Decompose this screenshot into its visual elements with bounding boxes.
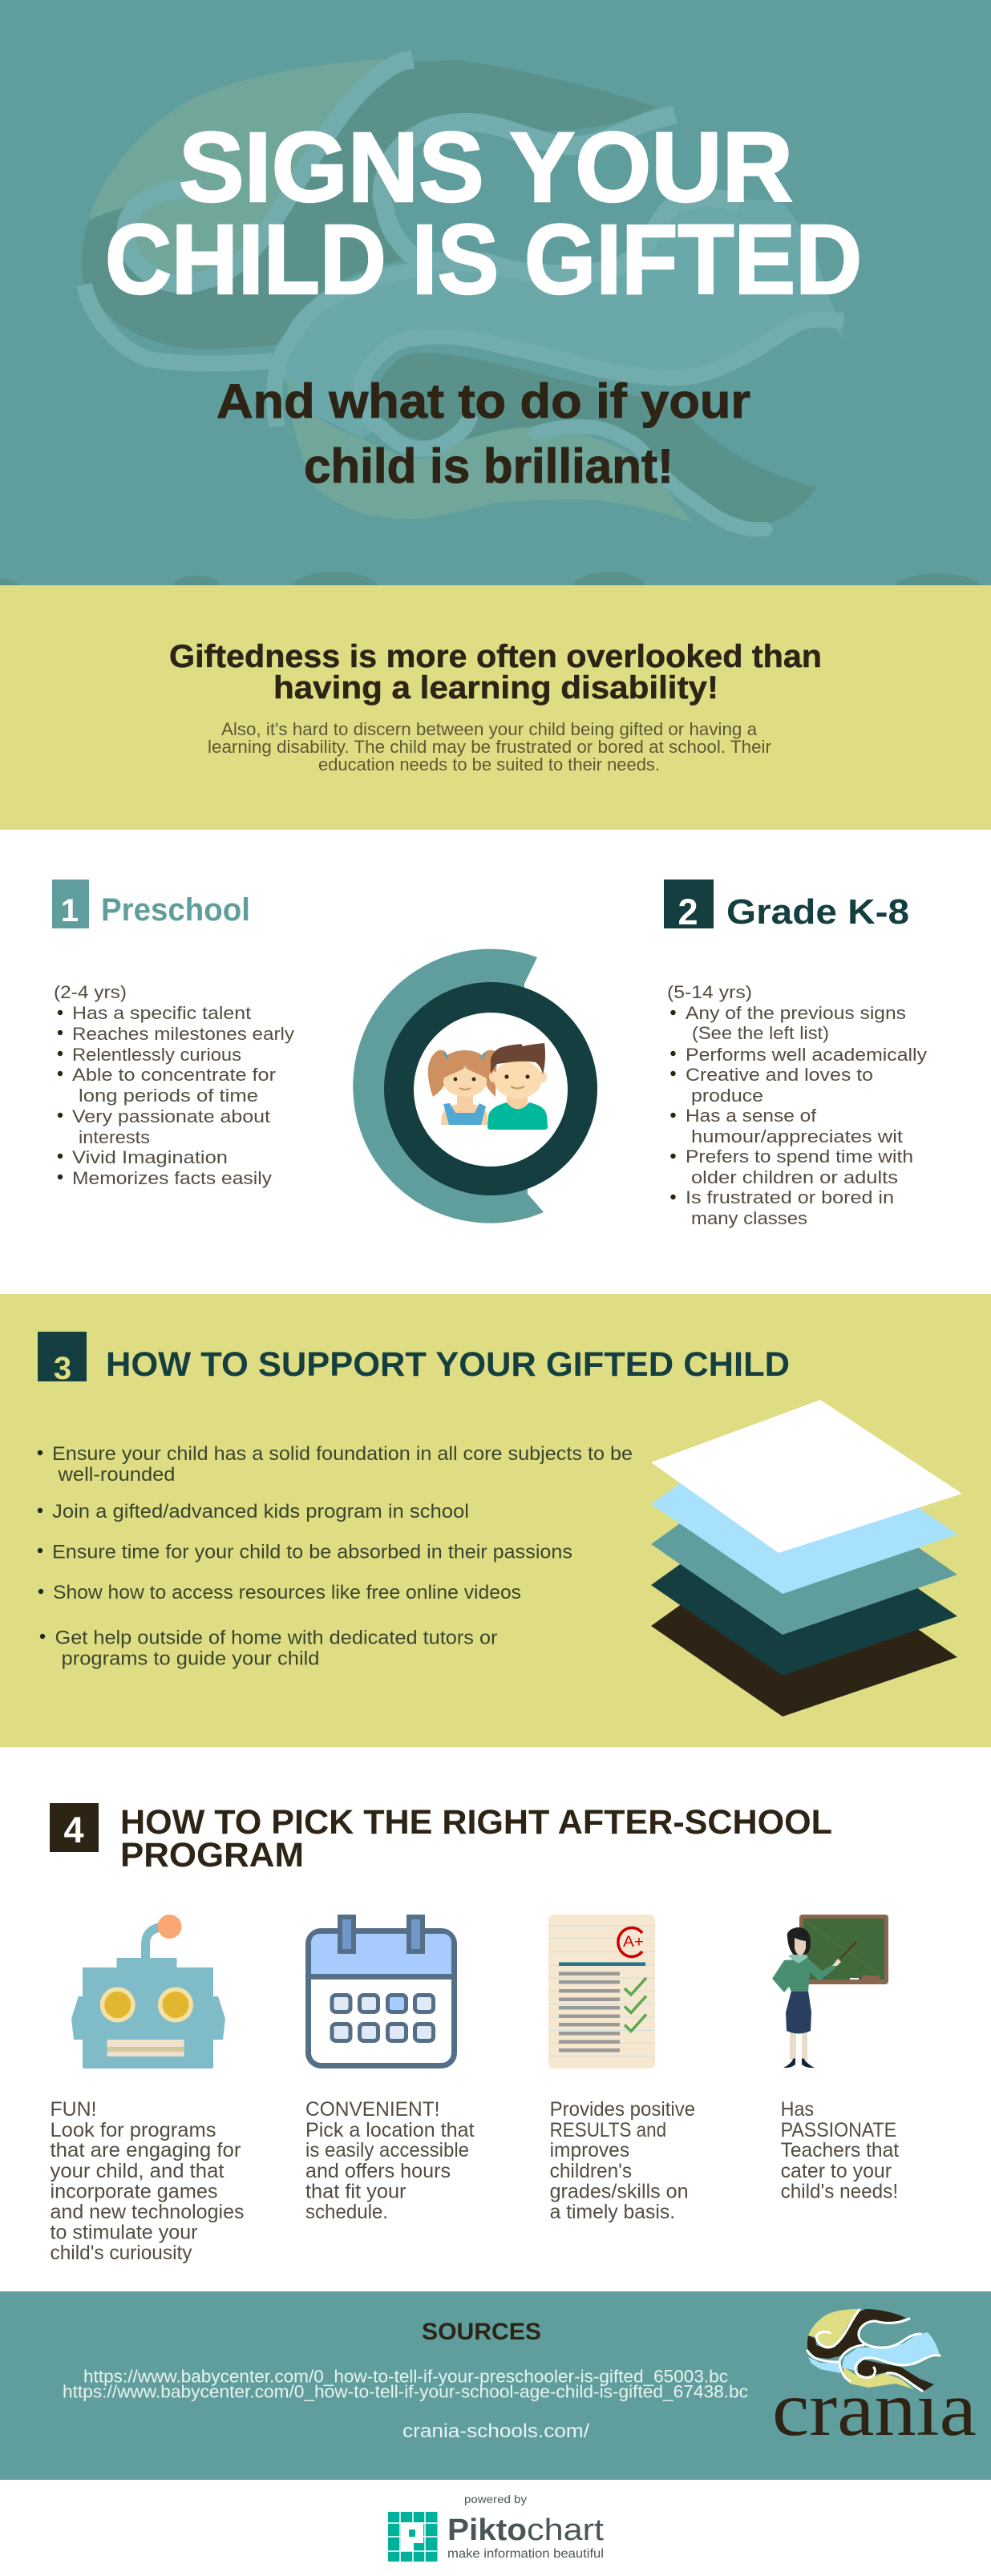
- wordmark: [447, 2513, 604, 2561]
- logo: crania: crania: [772, 2366, 977, 2453]
- text: fun: that are engaging for: [50, 2139, 241, 2161]
- section 2 heading: 2: [678, 892, 698, 932]
- logo: piktochart mark: [388, 2512, 438, 2562]
- section 1 heading: 1: [61, 893, 79, 928]
- text: results: grades/skills on: [550, 2181, 689, 2203]
- preschool list: Has a specific talent: [72, 1003, 251, 1023]
- footer: piktochart credit: powered by: [464, 2493, 527, 2505]
- section 2 heading: Grade K-8: [726, 892, 909, 932]
- section 3 heading: HOW TO SUPPORT YOUR GIFTED CHILD: [106, 1345, 790, 1384]
- grade list: Any of the previous signs: [686, 1003, 906, 1023]
- intro text: education needs to be suited to their needs.: [318, 754, 660, 774]
- text: teachers: [781, 2098, 899, 2203]
- text: fun: Look for programs: [50, 2119, 216, 2141]
- text: teachers: PASSIONATE: [781, 2119, 896, 2141]
- panel: sources: [0, 2291, 991, 2480]
- support list: Ensure time for your child to be absorbed in their passions: [52, 1541, 572, 1563]
- preschool list: Able to concentrate for: [72, 1065, 276, 1085]
- text: fun: to stimulate your: [50, 2222, 197, 2244]
- panel: intro: [0, 585, 991, 830]
- text: results: a timely basis.: [550, 2201, 675, 2223]
- icon: calendar: [308, 1917, 455, 2065]
- text: convenient: [305, 2098, 475, 2223]
- section 1 heading: Preschool: [101, 892, 250, 928]
- section 2 heading: [664, 880, 909, 932]
- bumps along hero bottom: [0, 572, 982, 607]
- logo: crania: [772, 2309, 977, 2453]
- source links: https://www.babycenter.com/0_how-to-tell-if-your-preschooler-is-gifted_65003.bc: [83, 2367, 728, 2387]
- support list: Get help outside of home with dedicated tutors or: [55, 1628, 497, 1648]
- grade list: older children or adults: [691, 1167, 898, 1187]
- grade list: [667, 982, 927, 1228]
- text: fun: FUN!: [50, 2098, 96, 2121]
- icon: report card: [548, 1915, 655, 2068]
- text: convenient: and offers hours: [305, 2160, 451, 2182]
- wordmark: make information beautiful: [447, 2547, 604, 2561]
- text: teachers: cater to your: [781, 2160, 892, 2182]
- grade list: Prefers to spend time with: [686, 1146, 913, 1167]
- text: results: Provides positive: [550, 2098, 695, 2121]
- text: results: improves: [550, 2139, 629, 2161]
- panel: hero: [0, 0, 991, 607]
- section 3 heading: 3: [54, 1351, 71, 1386]
- intro heading: having a learning disability!: [273, 670, 718, 706]
- section 4 heading: HOW TO PICK THE RIGHT AFTER-SCHOOL: [120, 1803, 832, 1842]
- source links: https://www.babycenter.com/0_how-to-tell-if-your-school-age-child-is-gifted_67438.bc: [63, 2382, 748, 2402]
- panel: ages: [52, 880, 927, 1228]
- support list: Join a gifted/advanced kids program in school: [52, 1501, 469, 1523]
- watermark: crania brain logo: [82, 59, 844, 529]
- grade list: (5-14 yrs): [667, 982, 752, 1002]
- section 3 heading: [38, 1332, 790, 1386]
- text: convenient: CONVENIENT!: [305, 2098, 439, 2121]
- subtitle: child is brilliant!: [304, 439, 673, 493]
- text: results: RESULTS and: [550, 2119, 666, 2141]
- grade list: humour/appreciates wit: [691, 1126, 903, 1146]
- support list: Show how to access resources like free online videos: [53, 1582, 521, 1603]
- section 4 heading: PROGRAM: [120, 1836, 304, 1874]
- preschool list: [54, 982, 294, 1188]
- preschool list: (2-4 yrs): [54, 982, 127, 1002]
- panel: how to pick: [50, 1803, 899, 2264]
- support list: programs to guide your child: [61, 1648, 319, 1669]
- text: fun: your child, and that: [50, 2160, 224, 2182]
- wordmark: chart: [527, 2513, 604, 2547]
- support list: [38, 1443, 633, 1669]
- section 1 heading: [52, 880, 250, 928]
- icon: report card: A+: [623, 1934, 644, 1951]
- section 4 heading: 4: [63, 1810, 84, 1850]
- text: convenient: that fit your: [305, 2181, 406, 2203]
- preschool list: Memorizes facts easily: [72, 1168, 272, 1188]
- website: crania-schools.com/: [402, 2420, 589, 2442]
- panel: how to support: [0, 1294, 991, 1747]
- icon: teacher at chalkboard: [772, 1915, 888, 2068]
- grade list: Performs well academically: [686, 1045, 927, 1065]
- text: teachers: child's needs!: [781, 2181, 898, 2203]
- title: [105, 113, 862, 315]
- text: teachers: Teachers that: [781, 2139, 899, 2161]
- title: SIGNS YOUR: [179, 113, 793, 223]
- intro text: [208, 719, 771, 774]
- grade list: produce: [691, 1086, 763, 1106]
- grade list: many classes: [691, 1208, 807, 1228]
- intro text: Also, it's hard to discern between your child being gifted or having a: [221, 719, 758, 739]
- text: fun: child's curiousity: [50, 2242, 192, 2264]
- grade list: Has a sense of: [686, 1106, 817, 1126]
- preschool list: Very passionate about: [72, 1106, 270, 1126]
- text: fun: [50, 2098, 244, 2264]
- icon: robot: [71, 1915, 225, 2068]
- preschool list: interests: [79, 1127, 150, 1147]
- preschool list: Relentlessly curious: [72, 1045, 241, 1065]
- text: fun: and new technologies: [50, 2201, 244, 2223]
- text: results: [550, 2098, 695, 2223]
- grade list: (See the left list): [692, 1023, 829, 1043]
- icon: two children: [428, 1043, 548, 1130]
- text: convenient: is easily accessible: [305, 2139, 469, 2161]
- grade list: Is frustrated or bored in: [686, 1187, 894, 1207]
- preschool list: Vivid Imagination: [72, 1147, 228, 1167]
- support list: well-rounded: [57, 1464, 175, 1486]
- ring graphic: [353, 949, 597, 1223]
- subtitle: [216, 374, 750, 493]
- title: CHILD IS GIFTED: [105, 205, 862, 315]
- footer: piktochart credit: [388, 2493, 604, 2562]
- sources heading: SOURCES: [422, 2319, 541, 2345]
- subtitle: And what to do if your: [216, 374, 750, 428]
- text: teachers: Has: [781, 2098, 814, 2121]
- preschool list: Reaches milestones early: [72, 1024, 294, 1044]
- wordmark: Pikto: [447, 2513, 527, 2547]
- source links: [63, 2367, 748, 2402]
- intro text: learning disability. The child may be frustrated or bored at school. Their: [208, 737, 771, 757]
- text: convenient: Pick a location that: [305, 2119, 475, 2141]
- section 4 heading: [50, 1803, 832, 1874]
- text: results: children's: [550, 2160, 632, 2182]
- support list: Ensure your child has a solid foundation in all core subjects to be: [52, 1443, 633, 1465]
- intro heading: Giftedness is more often overlooked than: [169, 639, 822, 674]
- stacked layers graphic: [651, 1400, 962, 1717]
- preschool list: long periods of time: [79, 1086, 258, 1106]
- intro heading: [169, 639, 822, 706]
- text: convenient: schedule.: [305, 2201, 388, 2223]
- grade list: Creative and loves to: [686, 1065, 873, 1085]
- text: fun: incorporate games: [50, 2181, 218, 2203]
